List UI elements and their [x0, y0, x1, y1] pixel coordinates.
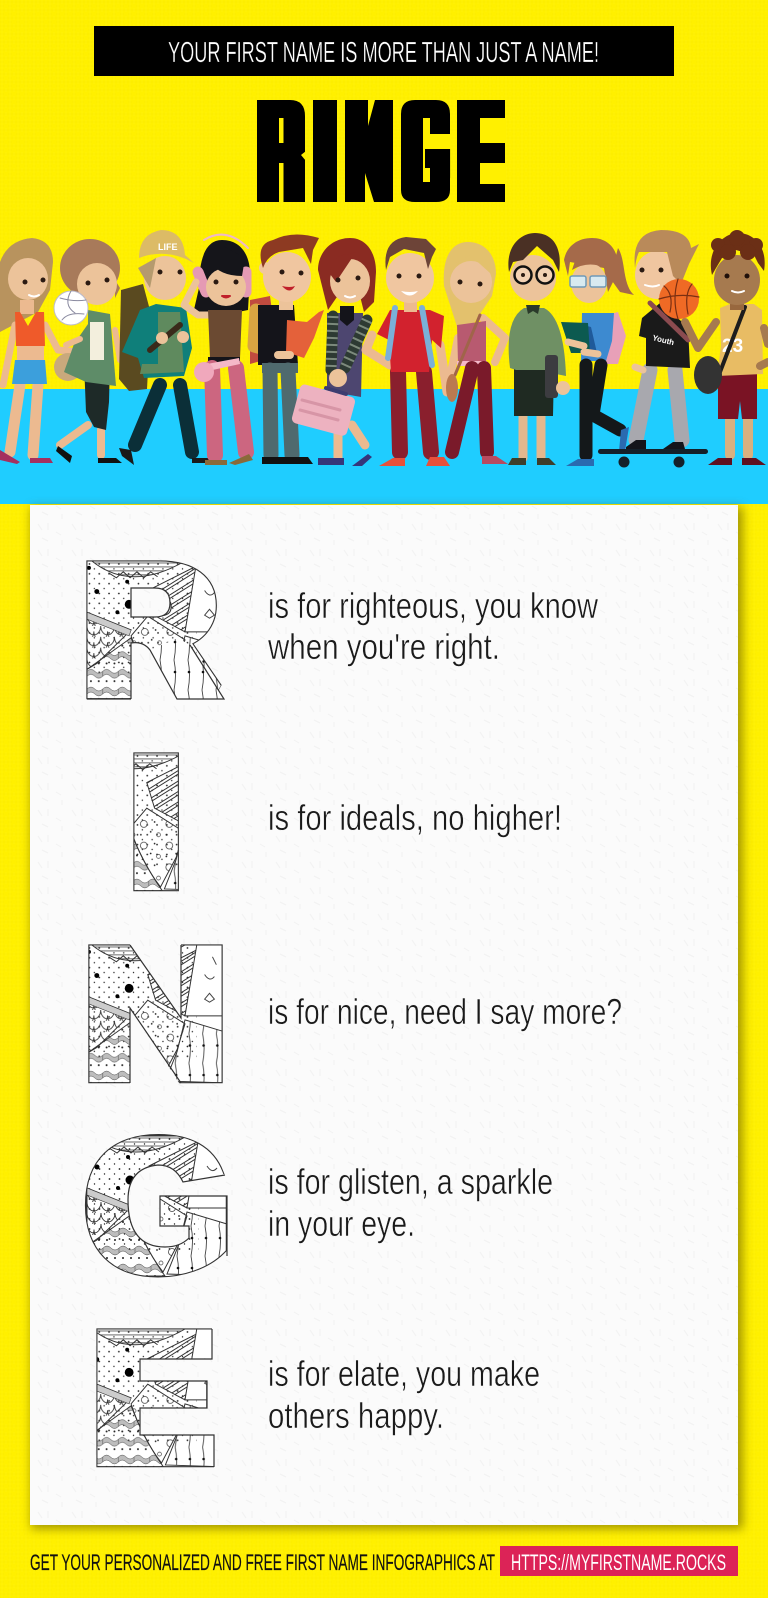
- student 5: boy reading a book: [250, 234, 324, 464]
- doodle letter N: N: [86, 917, 226, 1112]
- text: E lines: is for elate, you make: [268, 1353, 540, 1394]
- student 4: girl with pink headphones: [184, 235, 253, 465]
- student 7: boy in red t-shirt: [366, 237, 450, 466]
- text: E lines: others happy.: [268, 1395, 444, 1436]
- footer call to action: GET YOUR PERSONALIZED AND FREE FIRST NAME INFOGRAPHICS AT: [30, 1550, 495, 1575]
- text: G lines: is for glisten, a sparkle: [268, 1161, 553, 1202]
- illustration: row of students: [0, 230, 768, 468]
- letter row E: [96, 1328, 539, 1468]
- student 12: boy with tank top and bag: 23: [722, 336, 743, 357]
- text: I line: is for ideals, no higher!: [268, 797, 562, 838]
- student 8: blonde girl: [444, 242, 508, 464]
- student 11: boy on skateboard with basketball: Youth: [652, 333, 675, 347]
- letter row I: [133, 752, 560, 892]
- doodle letter E: [96, 1328, 215, 1468]
- doodle letter R: [86, 560, 225, 700]
- letter row G: [84, 1134, 552, 1278]
- letter row R: [86, 560, 598, 700]
- doodle letter R: R: [84, 533, 217, 728]
- letter row N: [88, 944, 621, 1084]
- student 3: boy with backpack and cap: LIFE: [158, 242, 178, 252]
- student 12: boy with tank top and bag: [694, 230, 768, 465]
- student 10: girl with glasses and ponytail: [561, 238, 634, 466]
- text: R line: is for righteous, you know: [268, 585, 599, 626]
- student 6: girl with pink bag: [291, 238, 376, 466]
- doodle letter N: [88, 944, 223, 1084]
- doodle letter E: E: [94, 1299, 214, 1495]
- student 2: girl with volleyball: [54, 239, 122, 463]
- doodle letter G: G: [87, 1107, 229, 1304]
- panel: white content card: [30, 505, 743, 1529]
- text: R line: when you're right.: [267, 626, 500, 667]
- text: E lines: [268, 1353, 540, 1436]
- doodle letter I: [133, 752, 179, 892]
- text: G lines: [268, 1161, 553, 1244]
- headline banner: [94, 26, 674, 76]
- student 11: boy on skateboard with basketball: [598, 230, 716, 468]
- student 9: boy with glasses: [508, 233, 570, 465]
- title: name: RINGE: [264, 96, 498, 206]
- doodle letter I: I: [131, 724, 182, 919]
- text: R line: [267, 585, 599, 667]
- student 3: boy with backpack and cap: [119, 230, 220, 465]
- student 1: girl with orange top: [0, 238, 80, 464]
- text: G lines: in your eye.: [268, 1203, 415, 1244]
- blue floor band: [0, 389, 768, 504]
- text: N line: is for nice, need I say more?: [268, 991, 622, 1032]
